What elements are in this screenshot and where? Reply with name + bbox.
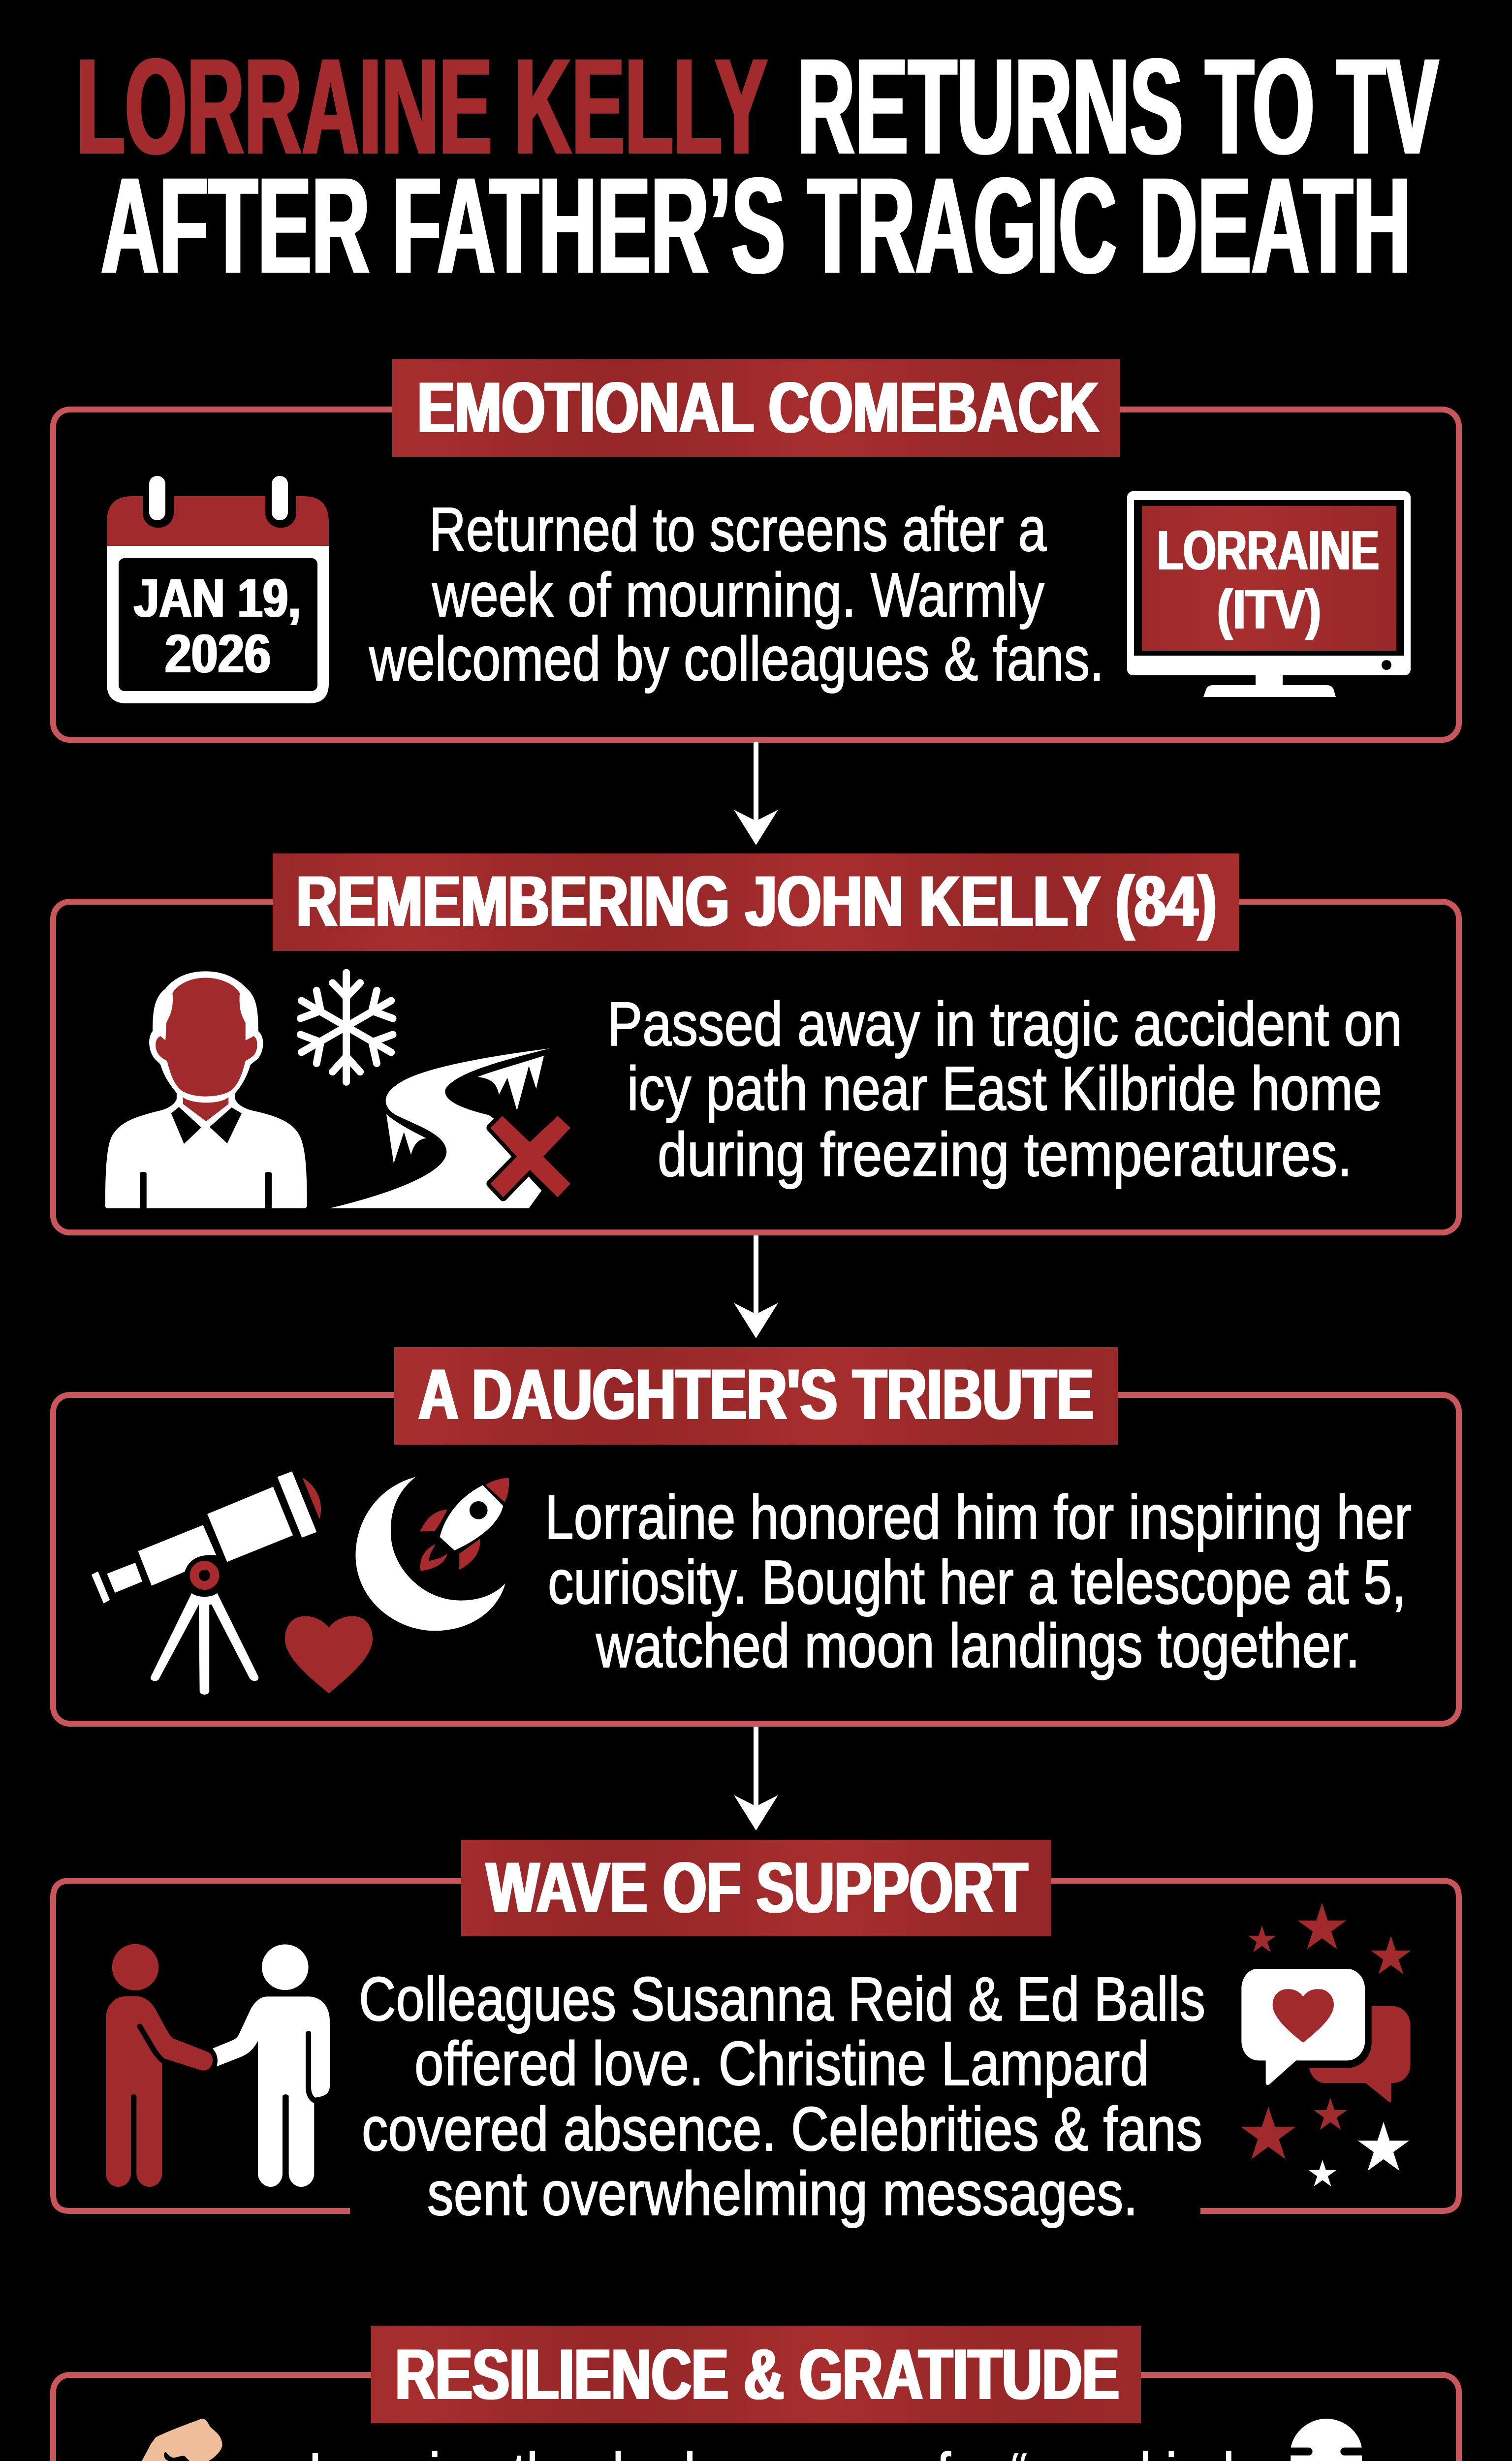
icon: television: LORRAINE [1157,519,1379,581]
arrow 1 [734,742,778,845]
icon: flexed arm [109,2419,289,2461]
icon: snowflake [301,973,393,1082]
arrow 3 [734,1727,778,1830]
text: support body: Colleagues Susanna Reid & Ed Balls [359,1964,1205,2034]
text: comeback body: Returned to screens after a [429,495,1047,564]
panel: resilience and gratitude [53,2326,1459,2461]
icon: icy road [329,1048,570,1208]
banner: wave of support: WAVE OF SUPPORT [486,1847,1028,1927]
title: LORRAINE KELLY [76,30,768,183]
icon: microphone [1276,2419,1377,2461]
banner: a daughter's tribute: A DAUGHTER'S TRIBUTE [418,1354,1094,1434]
icon: heart [285,1616,373,1694]
panel: a daughter's tribute [53,1347,1459,1724]
text: tribute body [545,1483,1412,1680]
text: remembering body: icy path near East Kilbride home [627,1054,1382,1123]
panel: remembering john kelly [53,853,1459,1232]
text: remembering body: during freezing temperatures. [658,1120,1352,1189]
text: support body: sent overwhelming messages. [427,2159,1138,2228]
banner: resilience and gratitude: RESILIENCE & GRATITUDE [395,2334,1119,2414]
banner: emotional comeback: EMOTIONAL COMEBACK [417,367,1099,447]
text: tribute body: watched moon landings together. [596,1611,1360,1680]
panel: emotional comeback [53,359,1459,740]
banner: resilience and gratitude [371,2326,1141,2423]
icon: television: (ITV) [1217,578,1321,640]
icon: speech bubbles and stars [1241,1903,1411,2186]
text: support body: offered love. Christine Lampard [414,2029,1149,2098]
banner: remembering john kelly [273,853,1239,951]
icon: telescope [92,1471,321,1695]
banner: emotional comeback [392,359,1120,457]
arrow 2 [734,1235,778,1338]
icon: calendar [107,473,329,703]
text: comeback body: welcomed by colleagues & fans. [369,624,1104,694]
icon: man portrait [105,971,307,1209]
text: remembering body [607,989,1402,1189]
banner: remembering john kelly: REMEMBERING JOHN KELLY (84) [296,861,1217,941]
text: support body: covered absence. Celebrities & fans [362,2094,1202,2164]
icon: red x [490,1116,570,1197]
banner: a daughter's tribute [394,1347,1118,1445]
text: support body [359,1964,1205,2228]
text: comeback body: week of mourning. Warmly [432,560,1044,630]
text: comeback body [369,495,1104,694]
icon: handshake people [106,1944,330,2187]
icon: calendar: 2026 [165,624,271,684]
title [76,30,1439,302]
icon: television [1127,491,1411,697]
panel: wave of support [53,1840,1459,2228]
banner: wave of support [461,1840,1051,1936]
icon: calendar: JAN 19, [134,568,301,629]
icon: crescent moon and rocket [356,1477,509,1631]
